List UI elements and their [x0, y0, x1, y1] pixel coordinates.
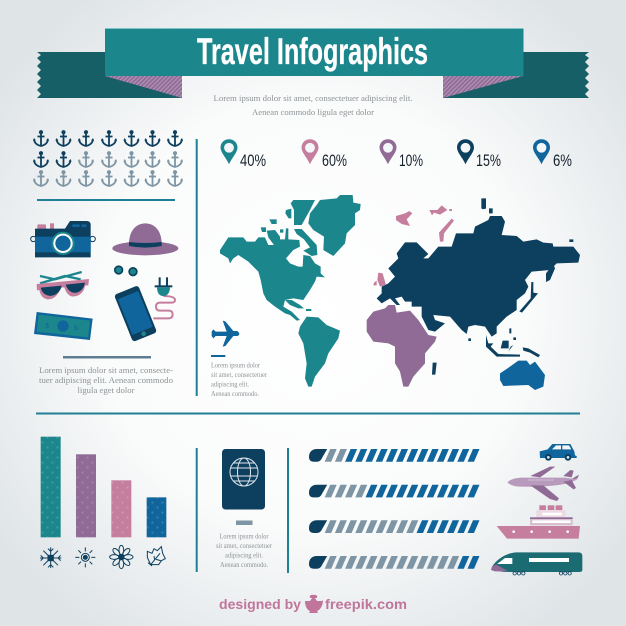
icon: airplane: [507, 467, 579, 501]
passport text: adipiscing elit.: [225, 552, 263, 560]
passport text: sit amet, consectetuer: [216, 543, 273, 550]
title: Travel Infographics: [197, 31, 428, 72]
icon: car: [540, 444, 577, 461]
plane icon with text: sit amet, consectetuer: [211, 372, 268, 379]
season icons: [40, 545, 165, 569]
progress bar: train: [309, 556, 480, 569]
location pins with percentages: [220, 139, 572, 170]
icon: bullet train: [491, 552, 582, 575]
icon: cruise ship: [497, 505, 580, 539]
icon: smartphone: [114, 285, 157, 342]
Africa: [367, 305, 437, 387]
footer credit: designed by: [219, 596, 301, 612]
ribbon banner: [37, 28, 589, 98]
icon: banknote: $: [74, 325, 78, 332]
pink islands: [373, 205, 454, 287]
world map: Eurasia, Africa, Australia: [367, 198, 580, 390]
icon: leaf: [147, 547, 165, 566]
icon: flower: [110, 545, 133, 569]
icon: buttons: [114, 265, 138, 276]
pin 6%: 6%: [553, 151, 572, 170]
pin 60%: [302, 139, 347, 170]
icon: snowflake: [40, 547, 61, 568]
footer credit: freepik.com: [325, 596, 407, 612]
pin 10%: 10%: [399, 151, 423, 170]
icon: plug and cable: [153, 277, 175, 318]
icon: camera: [31, 221, 95, 257]
left text block: Lorem ipsum dolor sit amet, consecte-: [39, 365, 173, 375]
plane icon with text: adipiscing elit.: [211, 382, 249, 388]
plane icon with text: [211, 321, 268, 398]
pin 10%: [380, 139, 423, 170]
pin 40%: [220, 139, 266, 170]
anchor pictogram grid: [33, 130, 183, 186]
left text block: tuer adipiscing elit. Aenean commodo: [39, 375, 173, 385]
transport icons: [491, 444, 582, 575]
pin 40%: 40%: [240, 151, 266, 170]
progress bar: car: [309, 449, 480, 462]
pin 60%: 60%: [322, 151, 347, 170]
icon: banknote: $: [45, 322, 49, 329]
passport text: Aenean commodo.: [220, 562, 268, 569]
passport text: [216, 534, 273, 569]
Eurasia: [377, 216, 580, 337]
icon: sun: [75, 547, 95, 567]
footer credit: [219, 595, 407, 613]
pin 15%: [457, 139, 501, 170]
header text: [214, 93, 412, 117]
icon: sunglasses: [37, 272, 89, 299]
icon: hat: [112, 223, 178, 255]
Australia: [500, 361, 545, 390]
icon: banknote: [34, 312, 93, 340]
left text block: [39, 365, 173, 395]
pin 6%: [533, 139, 572, 170]
bar chart: [41, 437, 166, 537]
progress bar: plane: [309, 485, 480, 497]
left text block: ligula eget dolor: [78, 385, 135, 395]
progress bar: ship: [309, 520, 480, 533]
passport text: Lorem ipsum dolor: [220, 534, 269, 540]
header text: Lorem ipsum dolor sit amet, consectetuer adipiscing elit.: [214, 93, 412, 103]
travel items icons: [31, 221, 178, 342]
header text: Aenean commodo ligula eget dolor: [252, 107, 374, 117]
passport: [222, 449, 265, 525]
plane icon with text: Aenean commodo.: [211, 391, 259, 398]
pin 15%: 15%: [476, 151, 501, 170]
world map: Americas: [220, 195, 361, 387]
plane icon with text: Lorem ipsum dolor: [211, 362, 261, 370]
